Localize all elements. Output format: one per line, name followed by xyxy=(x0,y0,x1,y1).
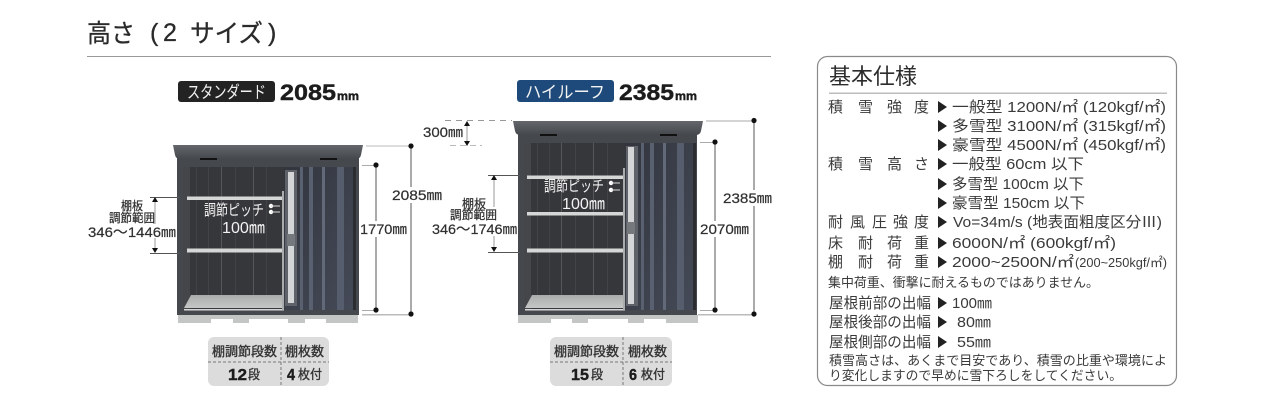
note: snow depth caution: 積雪高さは、あくまで目安であり、積雪の比重や環境によ xyxy=(829,353,1167,368)
note: concentrated load: 集中荷重、衝撃に耐えるものではありません。 xyxy=(828,275,1099,290)
badge: high roof: ハイルーフ xyxy=(525,83,605,102)
panel: high roof model xyxy=(423,80,772,386)
title: ( xyxy=(150,19,159,47)
label: adjustable pitch 100mm xyxy=(204,202,280,237)
table: shelf counts high roof: 15 xyxy=(571,367,589,384)
spec: snow depth: 豪雪型 150cm 以下 xyxy=(952,195,1085,212)
dimension: 2070mm xyxy=(700,139,749,313)
spec: roof overhangs: 屋根後部の出幅 xyxy=(829,314,931,331)
spec: roof overhangs xyxy=(829,295,992,351)
spec: shelf load: (200~250kgf/㎡) xyxy=(1075,255,1167,270)
table: shelf counts standard: 棚枚数 xyxy=(285,344,324,359)
dimension: shelf range xyxy=(88,197,180,254)
spec: snow load strength: 一般型 1200N/㎡ (120kgf/㎡) xyxy=(952,99,1166,116)
dimension: 2385mm xyxy=(698,118,772,317)
label: adjustable pitch 100mm: 調節ピッチ xyxy=(544,178,604,195)
heading: basic specifications: 基本仕様 xyxy=(829,64,917,89)
note: snow depth caution xyxy=(829,353,1167,383)
spec: wind pressure xyxy=(828,214,1162,231)
spec: shelf load: 棚耐荷重 xyxy=(828,254,929,271)
spec: snow depth: 一般型 60cm 以下 xyxy=(952,156,1084,173)
spec: roof overhangs: 80㎜ xyxy=(957,314,991,331)
dimension: 2070mm: 2070㎜ xyxy=(700,221,749,237)
table: shelf counts high roof: 棚調節段数 xyxy=(554,344,619,359)
dimension: shelf range: 346～1446㎜ xyxy=(88,224,176,240)
label: adjustable pitch 100mm: 調節ピッチ xyxy=(204,202,264,219)
spec: shelf load xyxy=(828,254,1167,271)
title xyxy=(87,19,276,48)
dimension: shelf range: 調節範囲 xyxy=(450,207,497,222)
height heading: 2385mm xyxy=(619,80,697,105)
dimension: shelf range: 棚板 xyxy=(121,198,143,213)
label: adjustable pitch 100mm: 100㎜ xyxy=(222,220,265,237)
table: shelf counts high roof xyxy=(550,337,672,386)
spec: roof overhangs: 55㎜ xyxy=(957,334,991,351)
spec: snow load strength: 積雪強度 xyxy=(828,99,929,116)
spec: snow load strength: 多雪型 3100N/㎡ (315kgf/㎡) xyxy=(952,117,1166,135)
table: shelf counts standard: 枚付 xyxy=(298,367,322,382)
dimension: 1770mm xyxy=(360,162,407,313)
title: ) xyxy=(268,19,276,47)
dimension: 2385mm: 2385㎜ xyxy=(723,190,772,206)
spec: roof overhangs: 屋根側部の出幅 xyxy=(829,334,931,351)
table: shelf counts high roof: 棚枚数 xyxy=(628,344,667,359)
dimension: shelf range: 棚板 xyxy=(462,196,486,211)
dimension: shelf range: 調節範囲 xyxy=(109,210,155,225)
table: shelf counts standard: 段 xyxy=(248,367,260,382)
height heading: 2085mm: mm xyxy=(337,89,359,103)
dimension: 2085mm: 2085㎜ xyxy=(392,187,442,203)
spec: wind pressure: Vo=34m/s (地表面粗度区分Ⅲ) xyxy=(953,214,1162,231)
spec: floor load: 床耐荷重 xyxy=(828,235,929,252)
spec: snow depth xyxy=(828,156,1085,212)
height heading: 2085mm xyxy=(280,80,359,105)
table: shelf counts standard: 12 xyxy=(228,367,247,384)
spec: roof overhangs: 100㎜ xyxy=(952,295,992,312)
spec: snow depth: 積雪高さ xyxy=(828,156,929,173)
title: 2 xyxy=(163,19,177,47)
label: adjustable pitch 100mm xyxy=(544,178,620,213)
dimension: 300mm xyxy=(423,120,512,146)
table: shelf counts standard: 棚調節段数 xyxy=(212,344,277,359)
height heading: 2385mm: 2385 xyxy=(619,80,674,105)
title: サイズ xyxy=(190,20,263,48)
spec: floor load xyxy=(828,235,1116,252)
table: shelf counts standard xyxy=(208,337,329,386)
spec: snow depth: 多雪型 100cm 以下 xyxy=(952,175,1084,193)
height heading: 2385mm: mm xyxy=(675,89,697,103)
badge: standard: スタンダード xyxy=(187,83,266,102)
height heading: 2085mm: 2085 xyxy=(280,80,336,105)
panel: basic specifications xyxy=(818,56,1176,386)
shed illustration: standard xyxy=(173,145,363,323)
shed illustration: high roof xyxy=(513,121,703,323)
spec: snow load strength: 豪雪型 4500N/㎡ (450kgf/㎡) xyxy=(952,137,1166,154)
note: snow depth caution: り変化しますので早めに雪下ろしをしてください。 xyxy=(829,368,1122,383)
spec: wind pressure: 耐風圧強度 xyxy=(828,214,929,231)
dimension: shelf range: 346～1746㎜ xyxy=(432,221,517,237)
dimension: 1770mm: 1770㎜ xyxy=(360,221,407,237)
dimension: 300mm: 300㎜ xyxy=(423,124,463,140)
table: shelf counts high roof: 段 xyxy=(591,367,603,382)
title: 高さ xyxy=(87,20,135,48)
table: shelf counts high roof: 枚付 xyxy=(641,367,665,382)
panel: standard model xyxy=(88,80,442,386)
table: shelf counts standard: 4 xyxy=(287,367,295,384)
spec: roof overhangs: 屋根前部の出幅 xyxy=(829,295,931,312)
label: adjustable pitch 100mm: 100㎜ xyxy=(562,196,605,213)
spec: snow load strength xyxy=(828,99,1166,154)
spec: floor load: 6000N/㎡ (600kgf/㎡) xyxy=(952,235,1116,252)
table: shelf counts high roof: 6 xyxy=(629,367,637,384)
dimension: shelf range xyxy=(432,175,520,253)
dimension: 2085mm xyxy=(362,143,442,317)
spec: shelf load: 2000~2500N/㎡ xyxy=(952,254,1074,271)
